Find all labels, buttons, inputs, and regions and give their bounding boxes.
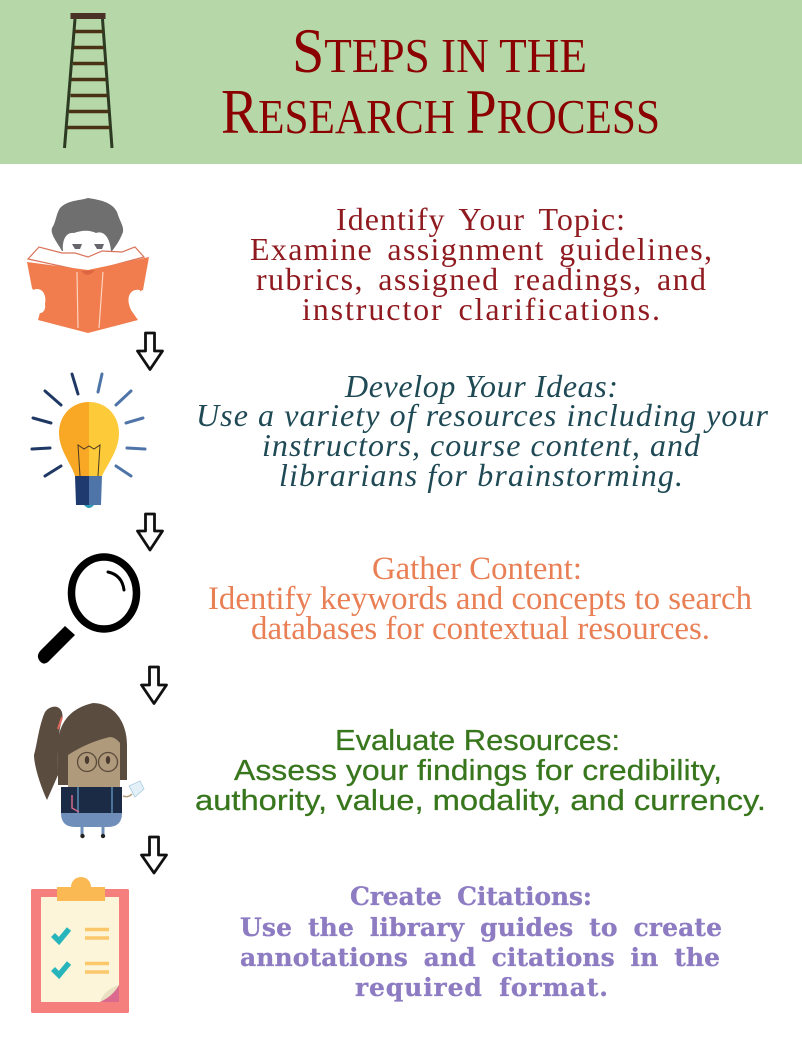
icon: magnifying glass [38,557,136,664]
title: STEPS IN THE [292,16,587,86]
arrow: step 3 to 4 [142,667,166,704]
text: evaluate resources: authority, value, modality, and currency. [195,785,766,817]
text: develop your ideas: instructors, course content, and [262,427,701,463]
icon: student with glasses [34,703,144,838]
text: create citations: annotations and citations in the [240,943,720,972]
text: identify your topic: Examine assignment guidelines, [250,231,712,267]
icon: ladder [64,13,112,148]
text: develop your ideas: Use a variety of resources including your [196,397,769,433]
arrow: step 1 to 2 [138,333,162,370]
text: gather content: databases for contextual resources. [251,611,710,647]
text: identify your topic: instructor clarifications. [302,291,660,327]
text: gather content: Gather Content: [372,551,582,587]
text: develop your ideas: Develop Your Ideas: [344,368,618,404]
icon: person reading a book [27,198,149,333]
arrow: step 4 to 5 [142,837,166,873]
text: evaluate resources: Assess your findings for credibility, [234,755,722,787]
text: identify your topic: Identify Your Topic: [336,201,625,237]
text: develop your ideas: librarians for brainstorming. [279,457,683,493]
text: create citations: Use the library guides to create [240,913,722,942]
text: gather content [208,551,752,647]
text: evaluate resources [195,725,766,817]
text: gather content: Identify keywords and concepts to search [208,581,752,617]
icon: clipboard checklist [31,877,129,1013]
text: create citations: Create Citations: [350,882,592,911]
arrow: step 2 to 3 [138,514,162,550]
text: evaluate resources: Evaluate Resources: [335,725,620,757]
text: identify your topic: rubrics, assigned readings, and [256,261,706,297]
text: create citations: required format. [355,973,608,1002]
text: identify your topic [250,201,712,327]
icon: light bulb [32,374,145,508]
title [221,16,660,147]
text: develop your ideas [196,368,769,493]
text: create citations [240,882,722,1002]
header band [0,0,802,164]
title: RESEARCH PROCESS [221,77,660,147]
